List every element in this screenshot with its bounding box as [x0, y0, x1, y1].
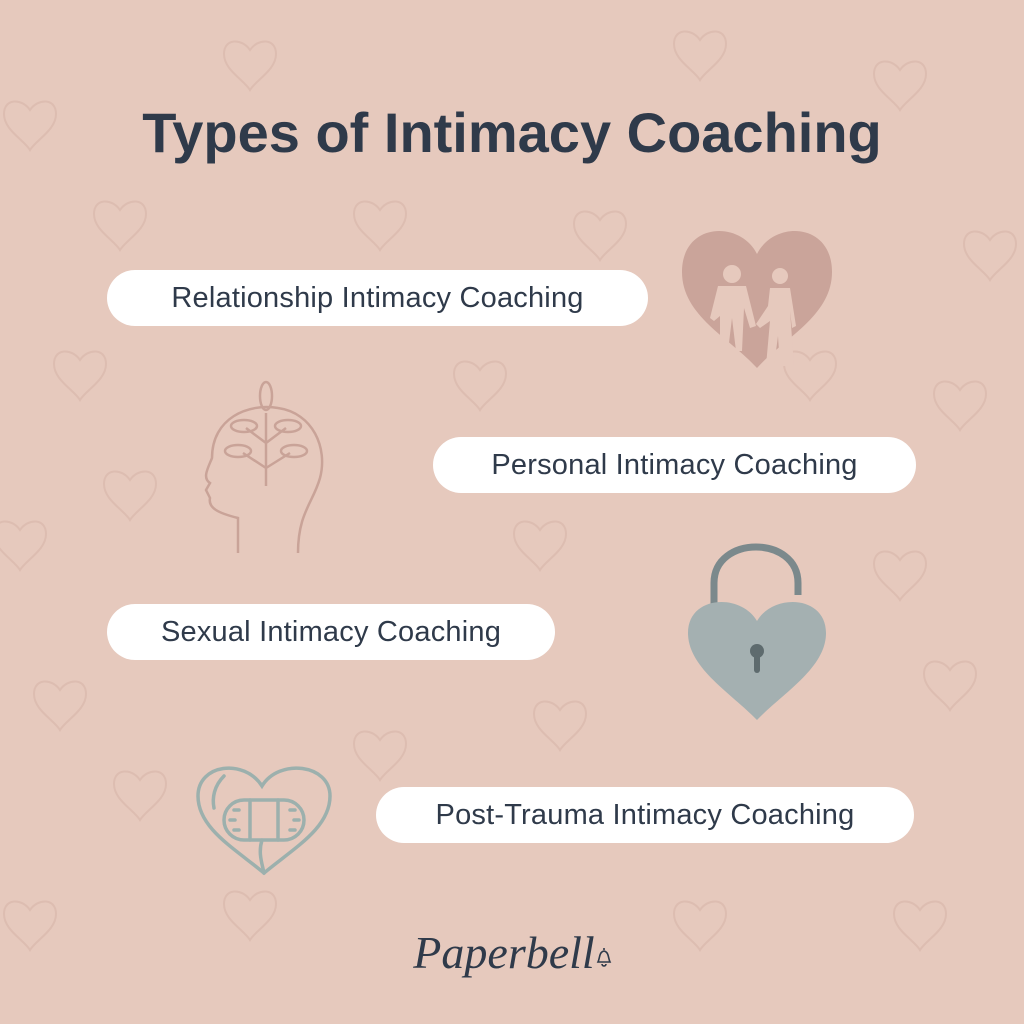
pill: post-trauma [376, 787, 914, 843]
icon: heart lock [688, 544, 826, 720]
pill: post-trauma: Post-Trauma Intimacy Coaching [436, 799, 854, 831]
pill: relationship: Relationship Intimacy Coaching [171, 282, 584, 314]
pill: sexual: Sexual Intimacy Coaching [161, 616, 501, 648]
pill: relationship [107, 270, 648, 326]
title: Types of Intimacy Coaching [142, 101, 882, 164]
icon: bandage heart [196, 766, 332, 876]
logo: Paperbell [413, 927, 595, 978]
icon: head with plant [204, 380, 324, 553]
pill: personal [433, 437, 916, 493]
icon: couple heart [682, 231, 832, 368]
pill: personal: Personal Intimacy Coaching [491, 449, 858, 481]
pill: sexual [107, 604, 555, 660]
